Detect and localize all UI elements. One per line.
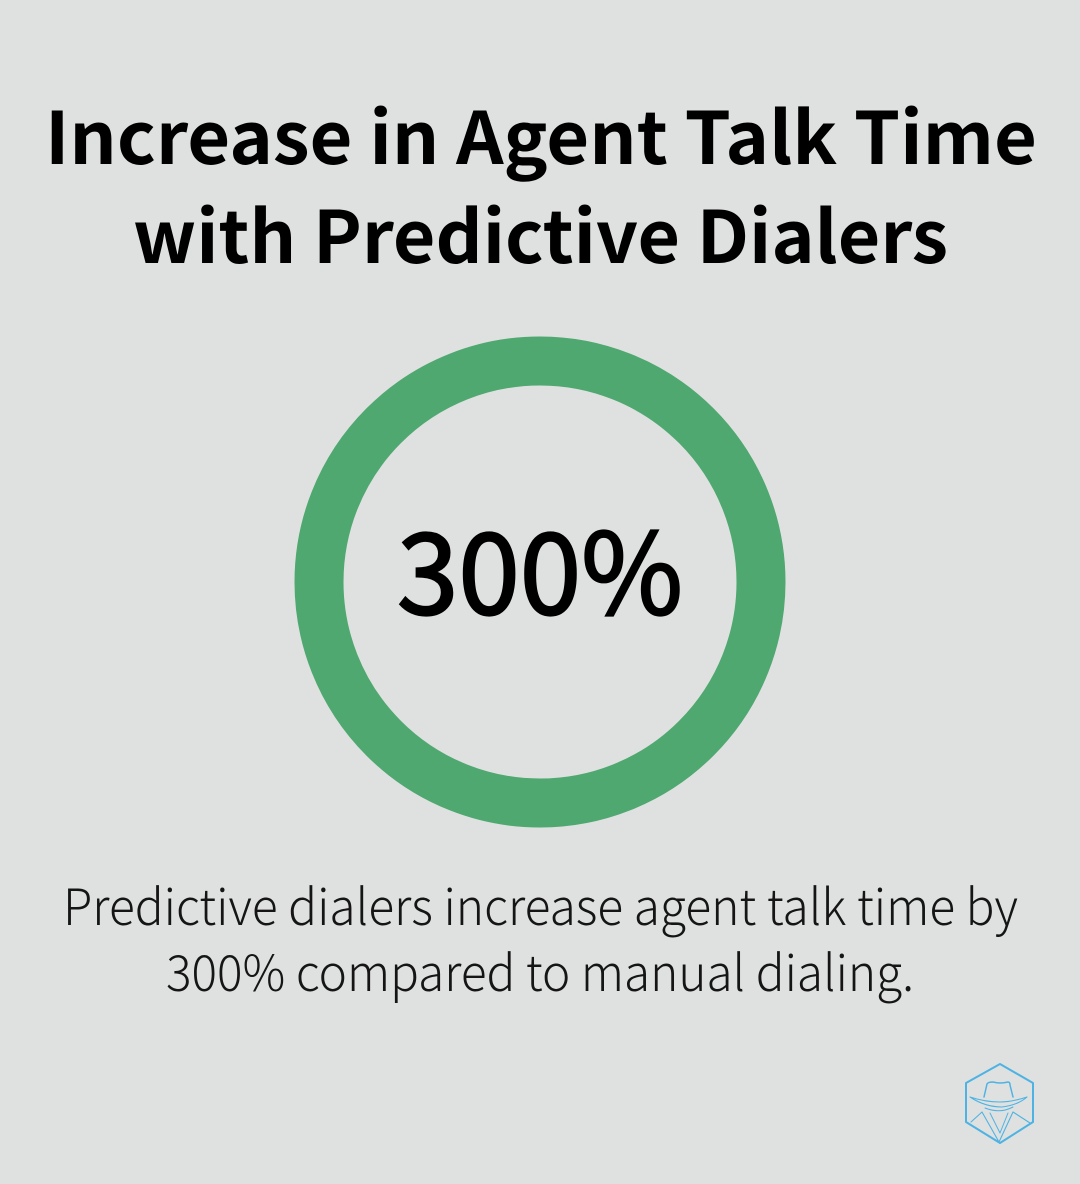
description text xyxy=(63,868,1018,1006)
title xyxy=(45,80,1037,284)
donut ring chart xyxy=(319,361,761,803)
title: Increase in Agent Talk Time xyxy=(45,80,1037,185)
description text: 300% compared to manual dialing. xyxy=(166,934,914,1006)
description text: Predictive dialers increase agent talk time by xyxy=(63,868,1018,940)
icon: logo, hexagon with spy in hat xyxy=(966,1064,1033,1143)
title: with Predictive Dialers xyxy=(133,179,948,284)
value: 300%: 300% xyxy=(397,485,683,647)
